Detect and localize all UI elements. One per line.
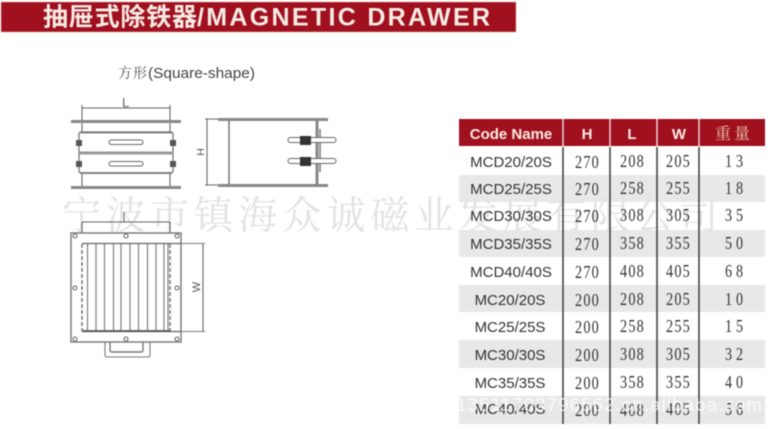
table row: MC40/40S: 200	[575, 400, 600, 420]
table row: MC25/25S: 258	[620, 316, 645, 336]
drawing: plan view with W dimension: W	[191, 281, 203, 292]
table row: MC20/20S: 208	[620, 289, 645, 309]
table row: MCD25/25S: 270	[575, 179, 600, 199]
title banner: /MAGNETIC DRAWER	[197, 4, 490, 32]
table row: MCD30/30S: 308	[620, 205, 645, 225]
table row: MC30/30S: MC30/30S	[475, 347, 545, 364]
table row: MCD30/30S: 270	[575, 206, 600, 226]
table row: MCD25/25S	[470, 178, 747, 199]
table row: MC35/35S: 200	[575, 373, 600, 393]
table row: MC40/40S: 408	[620, 400, 645, 420]
table row: MCD20/20S: MCD20/20S	[470, 154, 552, 171]
table row: MC40/40S: MC40/40S	[475, 401, 545, 418]
table row: MCD35/35S: MCD35/35S	[470, 236, 552, 253]
table row: MCD30/30S: 305	[666, 205, 691, 225]
table row: MCD20/20S	[470, 151, 747, 172]
table row: MCD35/35S: 270	[575, 234, 600, 254]
table row: MCD20/20S: 208	[620, 151, 645, 171]
table row: MCD25/25S: 255	[666, 178, 691, 198]
table row: MC35/35S: 358	[620, 372, 645, 392]
table header row: Code Name	[470, 126, 552, 143]
title banner	[1, 2, 516, 32]
table row: MC30/30S	[475, 344, 747, 365]
specification table	[459, 119, 765, 424]
table row: MCD25/25S: 258	[620, 178, 645, 198]
title banner: 抽屉式除铁器	[43, 2, 197, 32]
table row: MCD20/20S: 205	[666, 151, 691, 171]
table row: MCD40/40S: 405	[666, 261, 691, 281]
table row: MC25/25S: 255	[666, 316, 691, 336]
table row: MCD30/30S: MCD30/30S	[470, 208, 552, 225]
table row: MCD40/40S: MCD40/40S	[470, 264, 552, 281]
table row: MC20/20S: 10	[725, 289, 747, 309]
table row: MCD40/40S: 270	[575, 262, 600, 282]
table row: MC20/20S: 205	[666, 289, 691, 309]
table row: MC35/35S: 40	[725, 372, 747, 392]
table row: MCD30/30S: 35	[725, 205, 747, 225]
table header row: L	[627, 126, 637, 143]
drawing: side view with H dimension: H	[195, 148, 207, 156]
watermark: company name: 宁波市镇海众诚磁业发展有限公司	[62, 195, 718, 238]
table header row: 重量	[715, 125, 753, 143]
table row: MC20/20S: MC20/20S	[475, 292, 545, 309]
table row: MCD35/35S: 358	[620, 233, 645, 253]
table row: MC25/25S: 200	[575, 317, 600, 337]
subtitle: square shape: (Square-shape)	[148, 65, 255, 82]
drawing: side view with H dimension	[195, 119, 336, 186]
table row: MC35/35S: 355	[666, 372, 691, 392]
table row: MCD20/20S: 13	[725, 151, 747, 171]
table row: MCD40/40S	[470, 261, 747, 282]
table row: MC40/40S: 56	[725, 399, 747, 419]
table row: MC40/40S	[475, 399, 747, 420]
subtitle: square shape: 方形	[118, 66, 147, 82]
table row: MC40/40S: 405	[666, 399, 691, 419]
table zebra rows	[459, 175, 765, 424]
table row: MCD35/35S: 355	[666, 233, 691, 253]
drawing: front view with L dimension	[71, 95, 181, 188]
table row: MCD25/25S: 18	[725, 178, 747, 198]
table row: MCD40/40S: 68	[725, 261, 747, 281]
table row: MC25/25S: 15	[725, 316, 747, 336]
table row: MC25/25S: MC25/25S	[475, 319, 545, 336]
table row: MCD30/30S	[470, 205, 747, 226]
table row: MC35/35S: MC35/35S	[475, 375, 545, 392]
table row: MC30/30S: 308	[620, 344, 645, 364]
table row: MC30/30S: 32	[725, 344, 747, 364]
table row: MC30/30S: 200	[575, 345, 600, 365]
table row: MCD25/25S: MCD25/25S	[470, 181, 552, 198]
table row: MC20/20S: 200	[575, 290, 600, 310]
table row: MC35/35S	[475, 372, 747, 393]
table header row: H	[582, 126, 592, 143]
drawing: front view with L dimension: L	[122, 95, 129, 110]
table row: MCD35/35S: 50	[725, 233, 747, 253]
drawing: plan view with W dimension	[71, 212, 205, 357]
table row: MCD20/20S: 270	[575, 152, 600, 172]
table header row: W	[672, 126, 687, 143]
table row: MC20/20S	[475, 289, 747, 310]
watermark: web address: 13511703796562.cn.alibaba.com	[456, 394, 762, 415]
table row: MC30/30S: 305	[666, 344, 691, 364]
table header row	[459, 119, 765, 146]
table row: MCD35/35S	[470, 233, 747, 254]
table row: MC25/25S	[475, 316, 747, 337]
table row: MCD40/40S: 408	[620, 261, 645, 281]
